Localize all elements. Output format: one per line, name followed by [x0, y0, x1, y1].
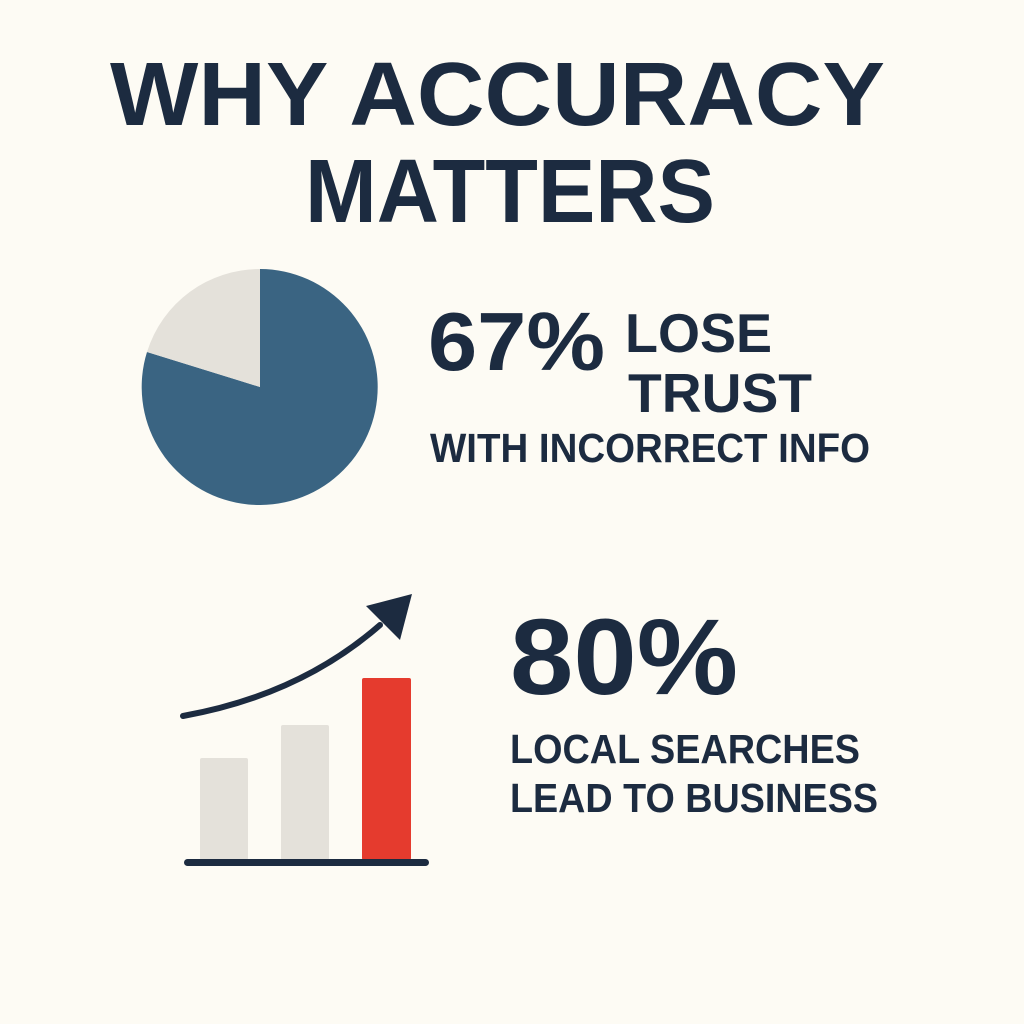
stat: 80% local searches: LOCAL SEARCHES	[510, 726, 860, 772]
title	[110, 45, 885, 242]
stat: 67% lose trust: TRUST	[628, 362, 812, 424]
bar chart with arrow	[183, 594, 429, 866]
arrow	[183, 594, 412, 716]
stat: 67% lose trust: 67%	[428, 295, 605, 388]
pie chart	[142, 269, 378, 505]
stat: 67% lose trust: WITH INCORRECT INFO	[430, 425, 870, 471]
stat: 80% local searches	[510, 596, 878, 821]
title: MATTERS	[305, 142, 715, 242]
stat: 80% local searches: LEAD TO BUSINESS	[510, 775, 878, 821]
stat: 67% lose trust: LOSE	[625, 302, 772, 364]
stat: 80% local searches: 80%	[510, 596, 738, 717]
title: WHY ACCURACY	[110, 45, 885, 145]
stat: 67% lose trust	[428, 295, 870, 471]
